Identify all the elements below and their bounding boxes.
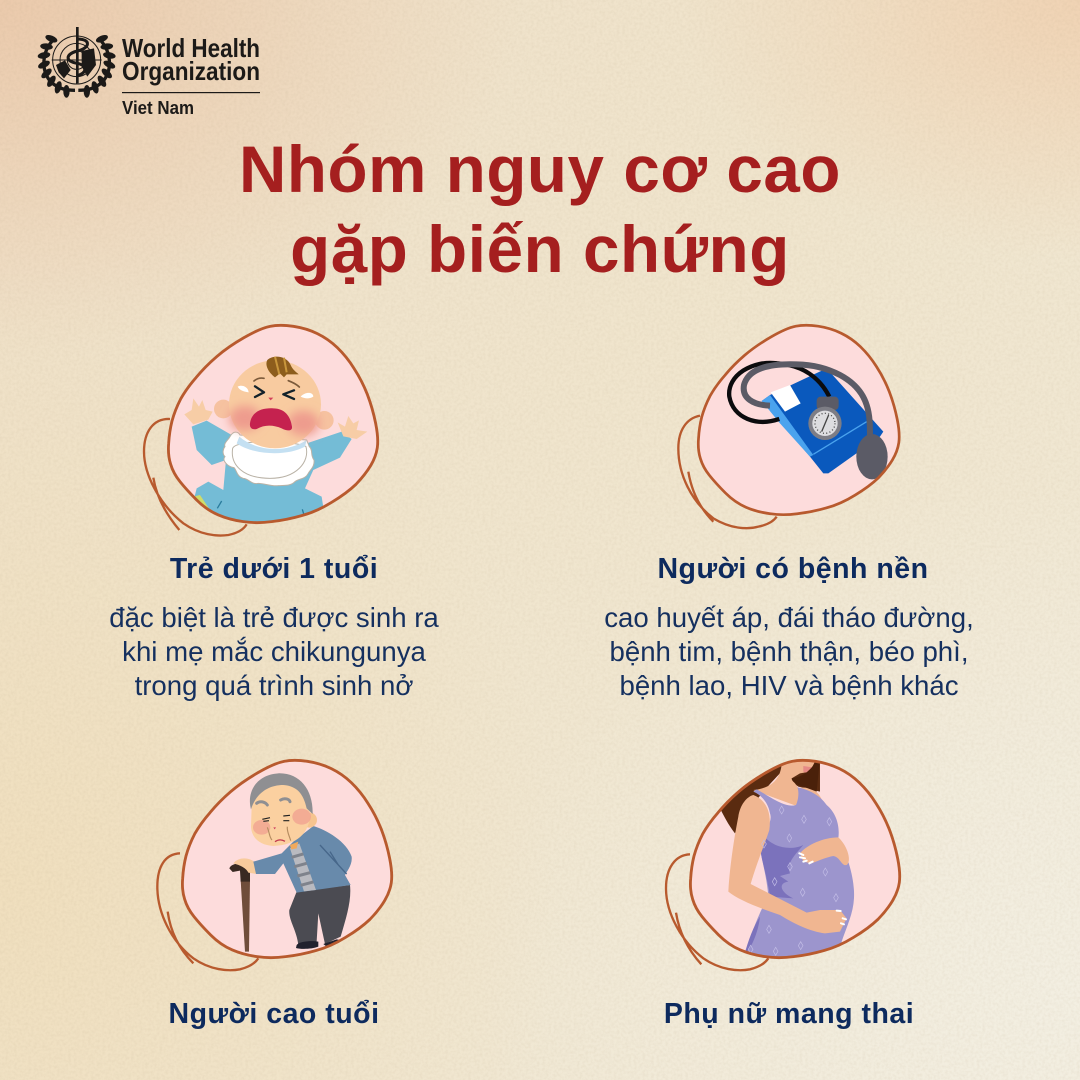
back outline strokes — [666, 854, 768, 970]
baby body — [187, 421, 352, 528]
grey tube — [744, 364, 870, 440]
jacket — [253, 826, 352, 893]
face — [257, 799, 290, 805]
illustration: crying baby — [144, 325, 378, 536]
illustration: blood pressure cuff — [678, 325, 899, 528]
icon: WHO emblem — [37, 27, 116, 98]
hand — [233, 858, 257, 874]
title: gặp biến chứng — [290, 213, 790, 286]
title: Nhóm nguy cơ cao — [239, 133, 841, 206]
cane — [241, 880, 250, 952]
heading: Phụ nữ mang thai — [664, 998, 914, 1030]
back outline strokes — [678, 416, 777, 528]
black tube — [729, 363, 829, 422]
bulb — [856, 434, 888, 479]
dress shadow — [746, 838, 803, 951]
shoes — [296, 939, 340, 949]
back outline strokes — [144, 419, 247, 536]
face and neck — [754, 762, 822, 806]
head — [214, 400, 230, 418]
heading: Trẻ dưới 1 tuổi — [170, 553, 378, 585]
paper tag — [771, 385, 801, 412]
panel: people with underlying conditions — [604, 325, 974, 701]
text block: trong quá trình sinh nở — [135, 670, 413, 701]
text block: khi mẹ mắc chikungunya — [122, 636, 426, 667]
logo text: Organization — [122, 56, 260, 86]
arm, lower hand — [800, 837, 849, 865]
dress — [743, 787, 854, 963]
illustration: elderly man with cane — [157, 760, 392, 970]
pattern — [779, 806, 784, 814]
panel: infants under 1 year — [109, 325, 439, 701]
hair — [250, 773, 313, 814]
panel: older people — [157, 760, 392, 1030]
striped shirt — [290, 843, 316, 891]
text block: đặc biệt là trẻ được sinh ra — [109, 602, 439, 633]
text block: cao huyết áp, đái tháo đường, — [604, 602, 974, 633]
logo: World Health Organization Viet Nam — [37, 27, 260, 118]
back outline strokes — [157, 853, 258, 970]
logo text — [122, 33, 260, 118]
heading: Người cao tuổi — [169, 998, 379, 1030]
text block: bệnh lao, HIV và bệnh khác — [619, 670, 959, 701]
hair — [718, 758, 820, 833]
illustration: pregnant woman — [666, 757, 900, 970]
panel: pregnant women — [664, 757, 914, 1030]
hands — [184, 398, 213, 424]
logo text: Viet Nam — [122, 97, 194, 118]
face — [254, 378, 299, 387]
trousers — [289, 885, 350, 945]
head — [307, 812, 317, 828]
heading: Người có bệnh nền — [657, 553, 929, 585]
arm, upper — [728, 795, 847, 933]
gauge — [817, 397, 839, 410]
hair — [266, 357, 299, 377]
logo text: World Health — [122, 33, 260, 63]
cuff — [762, 368, 883, 473]
text block: bệnh tim, bệnh thận, béo phì, — [610, 636, 968, 667]
bib — [223, 432, 314, 486]
